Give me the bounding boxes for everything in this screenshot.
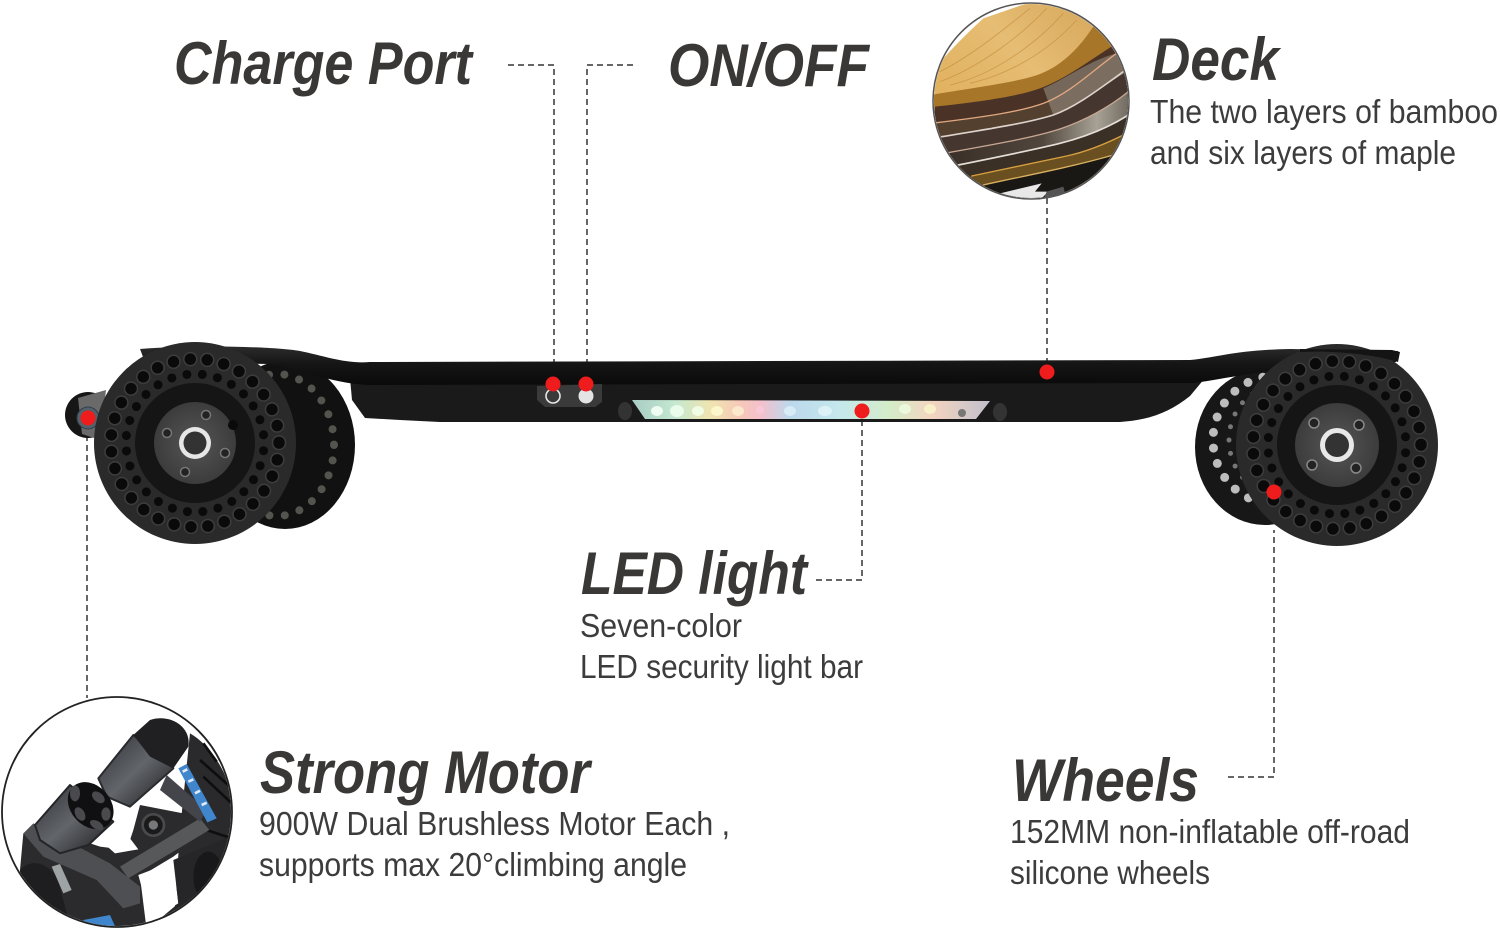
heading: Strong Motor: Strong Motor <box>260 739 593 806</box>
callout line: charge port <box>508 65 554 378</box>
icon: rear left motor disc <box>65 390 111 440</box>
text: wheels description <box>1010 813 1410 891</box>
heading: Charge Port: Charge Port <box>174 30 475 97</box>
callout line: motor <box>86 425 88 698</box>
callout line: deck <box>1046 198 1048 366</box>
panel: motor detail circle <box>20 718 231 926</box>
text: motor description <box>259 805 730 883</box>
callout line: LED light <box>816 418 862 580</box>
switch panel <box>537 384 602 407</box>
heading: LED light: LED light <box>581 540 810 607</box>
text: LED description: Seven-color <box>580 607 742 644</box>
text: motor description: supports max 20°climbing angle <box>259 846 687 883</box>
panel: deck detail circle <box>934 4 1128 198</box>
motor circle outline <box>2 697 232 927</box>
callout line: on/off <box>587 65 633 378</box>
deck circle outline <box>933 3 1129 199</box>
right front wheel <box>1236 344 1438 546</box>
text: LED description: LED security light bar <box>580 648 863 685</box>
LED light bar <box>632 400 990 419</box>
back right wheel <box>1195 369 1337 525</box>
deck board <box>140 347 1398 385</box>
text: motor description: 900W Dual Brushless Motor Each , <box>259 805 730 842</box>
enclosure bolts <box>618 402 1007 421</box>
skateboard <box>65 342 1438 546</box>
right wheel bracket <box>1300 349 1400 362</box>
marker dots <box>80 364 1282 500</box>
text: deck description: and six layers of maple <box>1150 134 1456 171</box>
text: LED description <box>580 607 863 685</box>
underside enclosure <box>350 378 1205 422</box>
heading: Deck: Deck <box>1152 26 1281 93</box>
text: deck description <box>1150 93 1498 171</box>
heading: ON/OFF: ON/OFF <box>668 32 870 99</box>
heading: Wheels: Wheels <box>1012 747 1199 814</box>
text: wheels description: silicone wheels <box>1010 854 1210 891</box>
left front wheel <box>94 342 296 544</box>
back left wheel <box>215 361 355 529</box>
text: wheels description: 152MM non-inflatable off-road <box>1010 813 1410 850</box>
callout line: wheels <box>1228 530 1274 777</box>
